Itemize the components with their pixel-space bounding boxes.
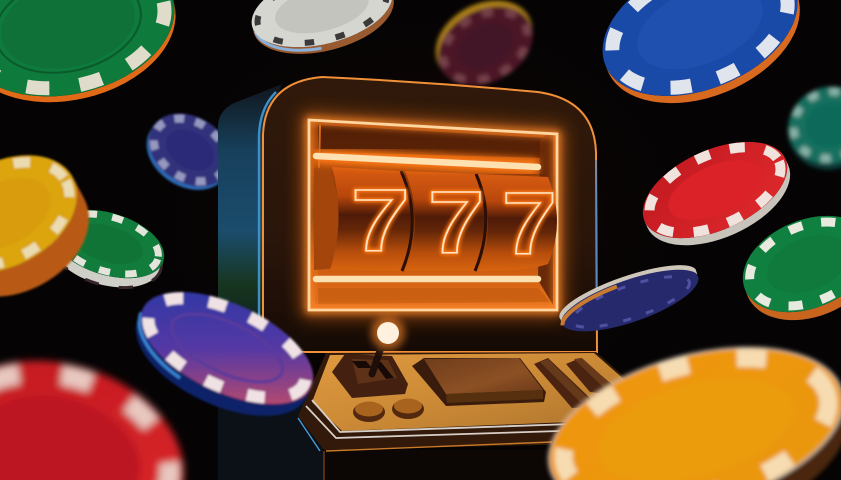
joystick base bbox=[332, 354, 408, 398]
chip: green right bbox=[728, 198, 841, 339]
chip: red lower left bbox=[0, 332, 206, 480]
slot machine bbox=[218, 77, 628, 480]
lower neon bar bbox=[316, 271, 538, 287]
number 7 reel three: 7 bbox=[502, 174, 557, 273]
joystick glowing ball bbox=[371, 316, 405, 350]
reel 1 bbox=[330, 167, 412, 271]
chip: red right bbox=[628, 122, 805, 265]
upper neon bar bbox=[316, 156, 538, 167]
number 7 reel two core: 7 bbox=[428, 174, 484, 272]
number 7 reel one core: 7 bbox=[351, 171, 410, 270]
neon window bbox=[308, 119, 558, 311]
chip: dark blue tilted centre right bbox=[554, 254, 705, 344]
chip: white top bbox=[244, 0, 402, 67]
chip: blue top right bbox=[582, 0, 821, 130]
chip: dim blue left bbox=[133, 99, 245, 205]
chip: green top left bbox=[0, 0, 190, 122]
large square pad bbox=[412, 358, 546, 406]
chip: green small left bbox=[41, 197, 173, 300]
console top surface bbox=[312, 353, 626, 431]
joystick stick bbox=[372, 336, 385, 374]
number 7 reel one: 7 bbox=[351, 171, 410, 270]
chip: orange lower right bbox=[530, 317, 841, 480]
number 7 reel three core: 7 bbox=[502, 174, 557, 273]
chip: yellow left bbox=[0, 131, 110, 321]
reels bbox=[314, 167, 557, 271]
reel 2 bbox=[405, 171, 485, 271]
window neon frame bbox=[309, 120, 557, 310]
chip: blue purple lower left bbox=[118, 269, 330, 440]
console chrome trim bbox=[312, 400, 572, 432]
round buttons bbox=[353, 398, 424, 422]
lower cabinet bbox=[218, 395, 583, 480]
reel 3 bbox=[478, 174, 557, 271]
number 7 reel two: 7 bbox=[428, 174, 484, 272]
chip: dim maroon top centre bbox=[422, 0, 548, 101]
machine side panel bbox=[218, 84, 282, 352]
slider buttons bbox=[534, 358, 614, 408]
control console bbox=[298, 316, 628, 480]
machine front panel bbox=[263, 77, 597, 352]
blue rim light bbox=[259, 92, 276, 330]
chip: teal far right bbox=[776, 75, 841, 181]
